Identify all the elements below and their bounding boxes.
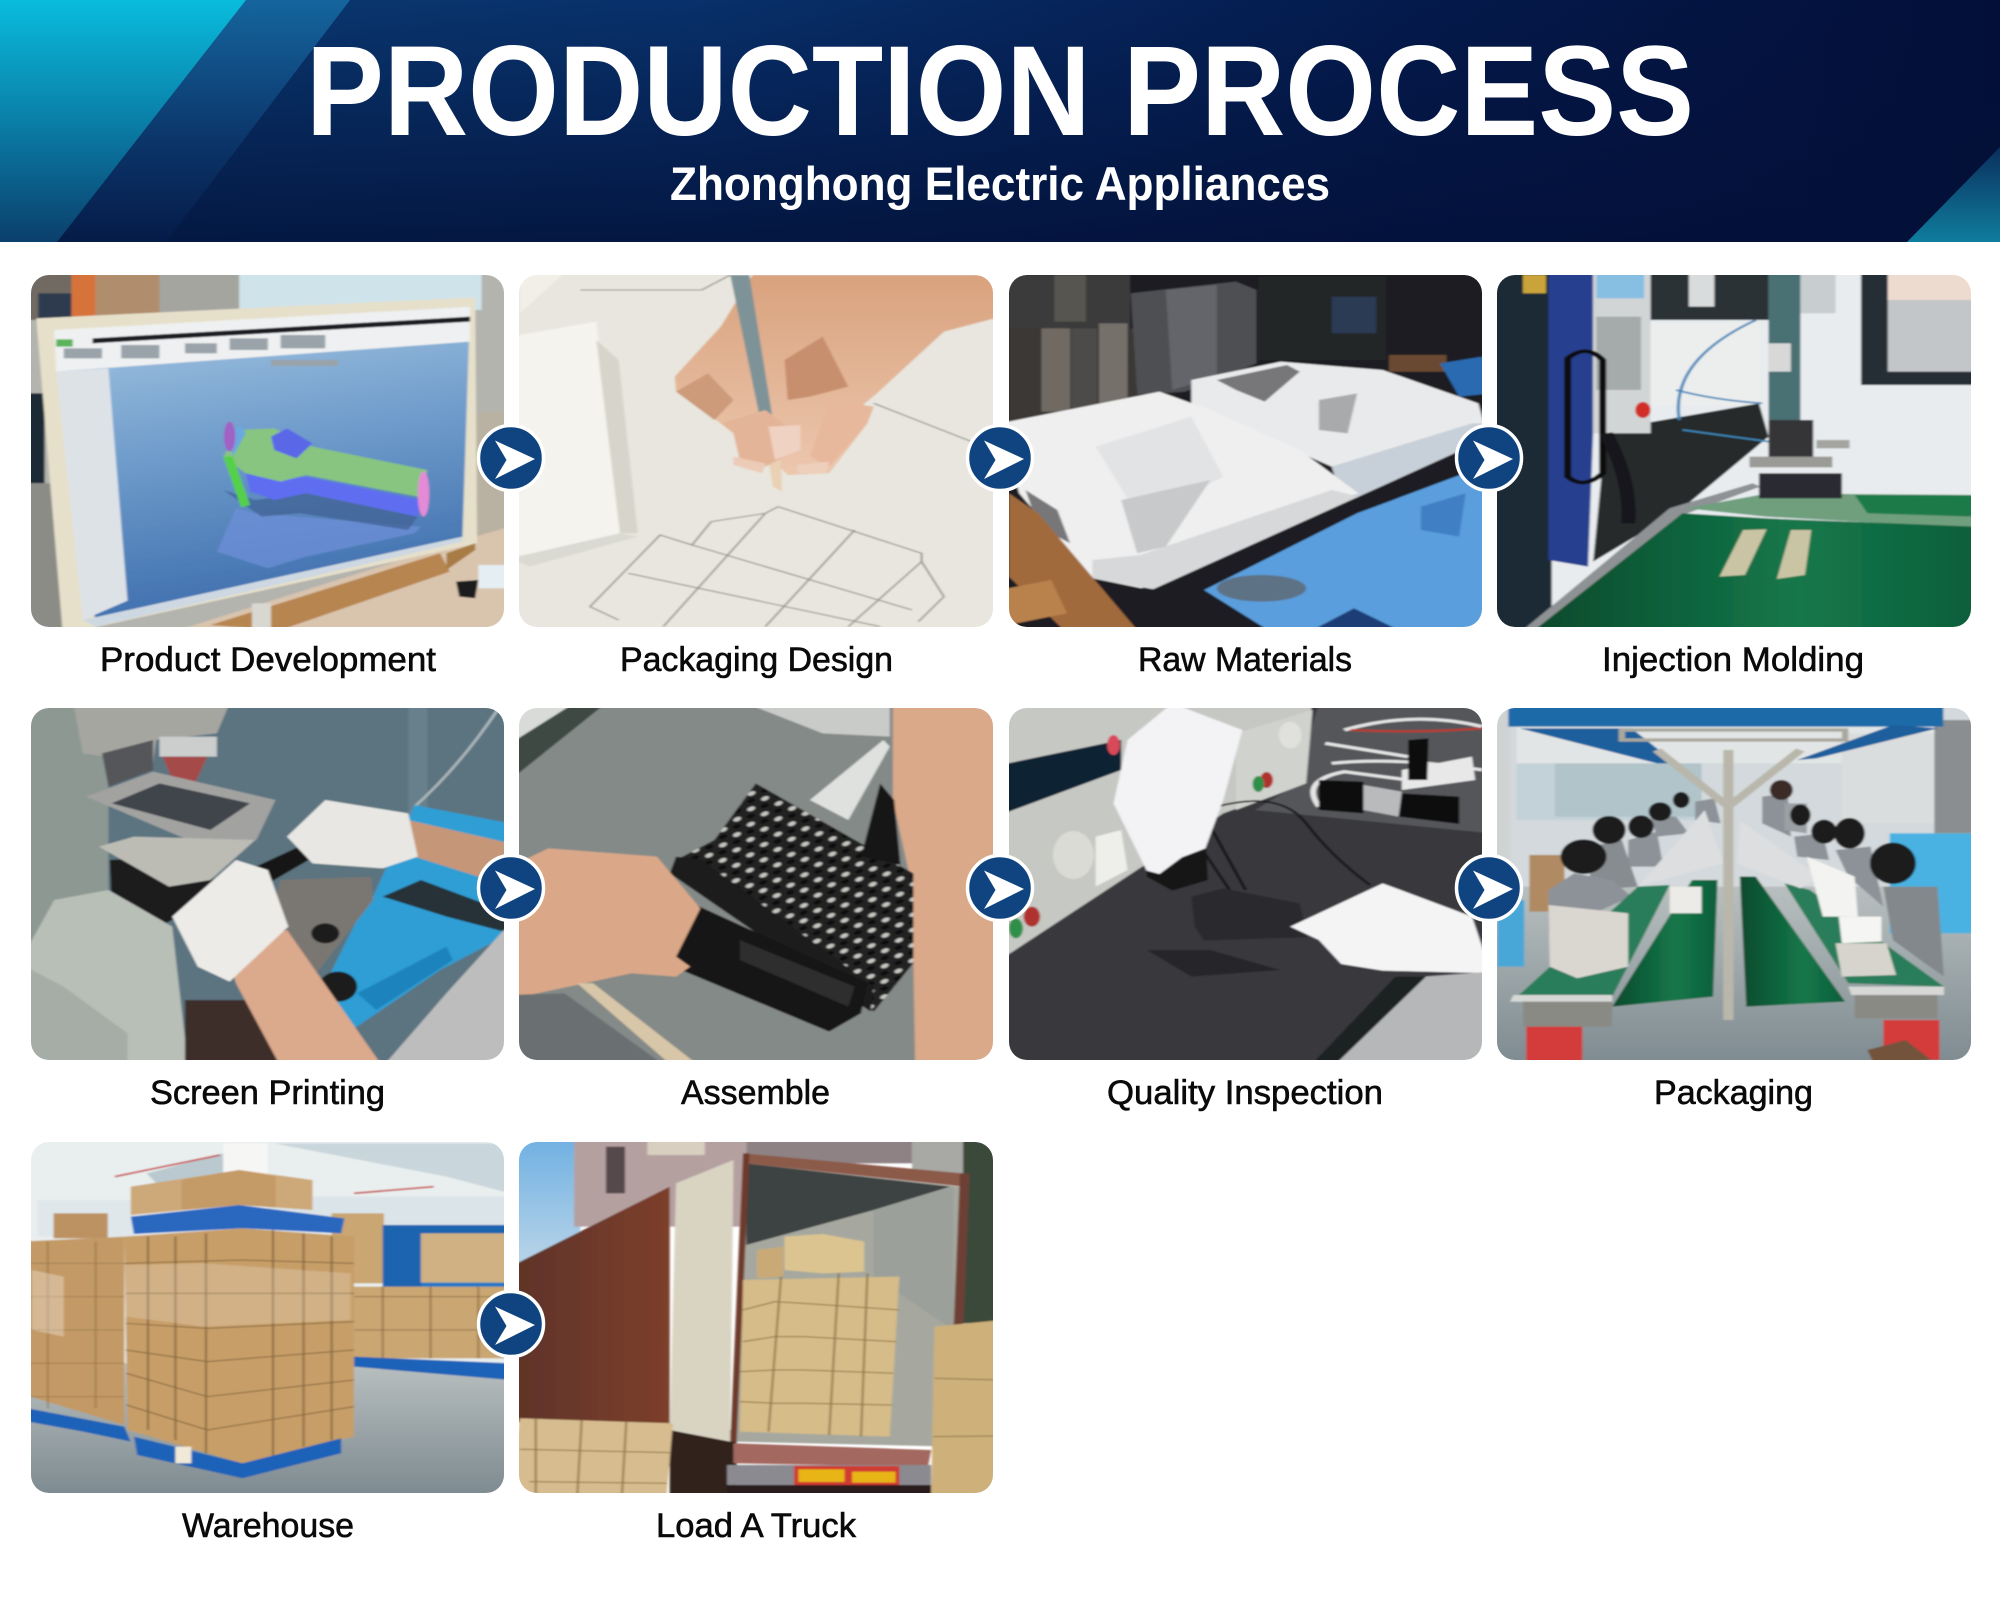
arrow: step 5 to 6 <box>478 856 544 920</box>
caption: Packaging Design <box>620 641 893 679</box>
subtitle: Zhonghong Electric Appliances <box>670 157 1330 210</box>
caption: Raw Materials <box>1138 641 1352 679</box>
panel: Quality Inspection <box>1000 703 1491 1112</box>
panel: Load A Truck <box>510 1137 1001 1545</box>
panel: Screen Printing <box>19 703 517 1112</box>
arrow: step 2 to 3 <box>968 426 1032 490</box>
caption: Injection Molding <box>1602 641 1864 679</box>
photo: injection machine and conveyor <box>1491 270 1982 633</box>
title: PRODUCTION PROCESS <box>306 20 1694 163</box>
photo: hand sketching box net <box>510 270 1001 633</box>
caption: Product Development <box>100 641 437 679</box>
photo: cartons loaded into shipping container <box>510 1137 1001 1497</box>
panel: Assemble <box>510 703 1001 1112</box>
panel: Packaging Design <box>510 270 1001 679</box>
panel: Raw Materials <box>1000 270 1491 679</box>
caption: Quality Inspection <box>1107 1074 1383 1112</box>
photo: stacked cartons on blue pallets <box>19 1137 517 1500</box>
caption: Screen Printing <box>150 1074 385 1112</box>
photo: assembling circuit board in tray <box>510 703 1001 1067</box>
photo: monitor with CAD model <box>19 270 523 633</box>
arrow: step 3 to 4 <box>1456 426 1522 490</box>
arrow: step 1 to 2 <box>478 426 544 490</box>
arrow: step 6 to 7 <box>968 856 1032 920</box>
panel: Warehouse <box>19 1137 517 1545</box>
photo: resin bags on pallet <box>1000 270 1491 633</box>
arrow: step 9 to 10 <box>478 1292 544 1356</box>
photo: pad printing machine with gloved hands <box>19 703 517 1067</box>
arrow: step 7 to 8 <box>1456 856 1522 920</box>
header banner <box>0 0 2000 242</box>
caption: Assemble <box>681 1074 830 1112</box>
caption: Packaging <box>1654 1074 1813 1112</box>
caption: Load A Truck <box>656 1507 857 1545</box>
photo: gloved hands testing product <box>1000 703 1491 1067</box>
panel: Injection Molding <box>1491 270 1982 679</box>
panel: Product Development <box>19 270 523 679</box>
photo: packaging line workers <box>1491 703 1982 1067</box>
panel: Packaging <box>1491 703 1982 1112</box>
caption: Warehouse <box>182 1507 354 1545</box>
